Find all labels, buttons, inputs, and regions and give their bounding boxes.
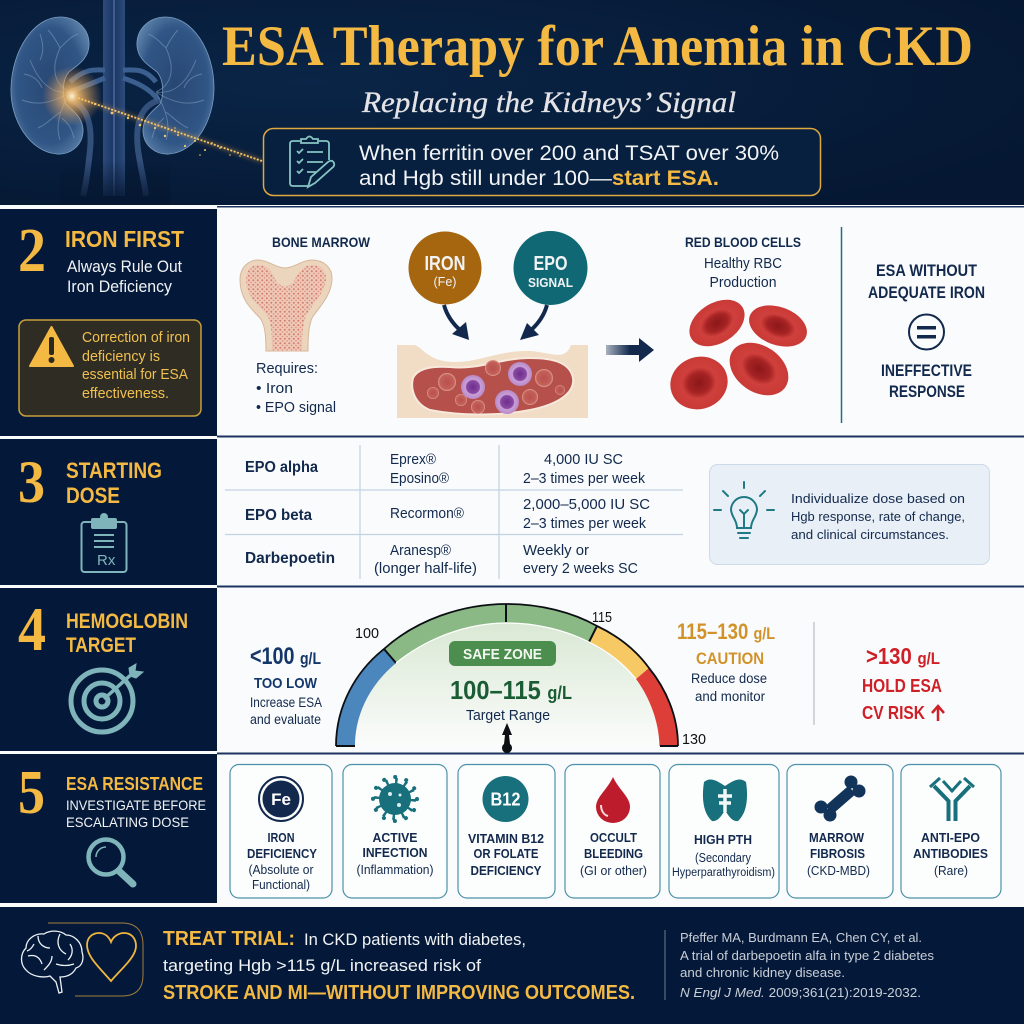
warning text: essential for ESA	[82, 366, 188, 383]
card text: OCCULT	[590, 831, 637, 845]
left status: too low	[250, 643, 322, 727]
callout: start criteria	[264, 128, 820, 196]
target range value	[450, 675, 572, 724]
row: EPO beta	[245, 496, 650, 532]
icon: light bulb	[714, 482, 774, 538]
panel: section 3 starting dose	[0, 439, 217, 585]
row: EPO alpha: EPO alpha	[245, 459, 318, 476]
subheading: Always Rule Out	[67, 257, 182, 276]
safe zone badge: SAFE ZONE	[463, 646, 542, 663]
subtitle: Replacing the Kidneys’ Signal	[361, 86, 736, 119]
right status: hold ESA: HOLD ESA	[862, 676, 942, 696]
callout text: When ferritin over 200 and TSAT over 30%	[359, 142, 779, 165]
iron circle: (Fe)	[434, 274, 456, 289]
gauge: green segment	[384, 604, 597, 663]
citation: Pfeffer MA, Burdmann EA, Chen CY, et al.	[680, 930, 922, 945]
subheading: ESCALATING DOSE	[66, 814, 189, 830]
card text: BLEEDING	[584, 847, 643, 861]
card text: FIBROSIS	[810, 847, 865, 861]
icon: bone	[240, 260, 332, 351]
card text: DEFICIENCY	[470, 864, 542, 878]
heading: hemoglobin target	[66, 610, 188, 657]
right status: hold ESA: >130 g/L	[866, 643, 940, 669]
section number 5: 5	[18, 759, 45, 827]
heading: hemoglobin target: TARGET	[66, 634, 136, 657]
icon: heart	[87, 933, 136, 981]
panel: section 2 iron first	[0, 209, 217, 436]
iron circle	[408, 232, 482, 304]
card text: (Absolute or	[248, 863, 314, 877]
arrow: EPO to marrow	[520, 305, 547, 340]
red blood cells label: Production	[710, 275, 776, 291]
card text	[913, 831, 988, 878]
row: Darbepoetin: (longer half-life)	[374, 560, 477, 577]
red blood cells label: Healthy RBC	[704, 256, 782, 272]
frame around icons	[48, 923, 143, 996]
gauge needle	[502, 723, 512, 753]
TREAT trial summary: STROKE AND MI—WITHOUT IMPROVING OUTCOMES.	[163, 982, 635, 1004]
card text: (Secondary	[695, 851, 752, 865]
callout text: and clinical circumstances.	[791, 527, 949, 542]
card text: (Rare)	[934, 864, 968, 878]
icon: warning triangle	[30, 327, 73, 366]
card text: OR FOLATE	[474, 847, 538, 861]
citation	[680, 930, 935, 1000]
right status: caution: 115–130 g/L	[677, 619, 775, 644]
card text: ACTIVE	[372, 831, 418, 845]
right status: caution: and monitor	[695, 689, 765, 704]
right status: caution: CAUTION	[696, 649, 764, 668]
card text: HIGH PTH	[694, 833, 752, 847]
row: Darbepoetin: Darbepoetin	[245, 550, 335, 567]
icon: B12: B12	[490, 790, 520, 810]
icon: prescription clipboard: Rx	[97, 552, 116, 569]
card text	[468, 832, 544, 878]
heading: ESA resistance: ESA RESISTANCE	[66, 774, 203, 794]
warning text	[82, 329, 190, 402]
callout text	[791, 491, 965, 542]
callout text	[359, 142, 779, 190]
requires list: • EPO signal	[256, 399, 336, 416]
subheading: Iron Deficiency	[67, 277, 172, 296]
icon: magnifier	[88, 840, 133, 884]
card: anti-EPO antibodies	[901, 764, 1001, 898]
gauge: red segment	[636, 668, 678, 746]
bone marrow label: BONE MARROW	[272, 234, 371, 250]
gauge: yellow segment	[589, 626, 649, 679]
TREAT trial summary: TREAT TRIAL:	[163, 928, 295, 950]
row: EPO beta: 2,000–5,000 IU SC	[523, 496, 650, 513]
marrow cross-section	[397, 345, 588, 418]
card text	[580, 831, 647, 878]
arrow: to red blood cells	[606, 338, 654, 362]
row: EPO alpha: Eprex®	[390, 451, 436, 468]
gauge: blue segment	[336, 649, 396, 746]
icon: blood drop	[596, 777, 630, 823]
icon: clipboard and pen	[290, 136, 334, 187]
left status: too low: Increase ESA	[250, 695, 322, 710]
target range value: 100–115 g/L	[450, 675, 572, 705]
card text: (CKD-MBD)	[807, 864, 870, 878]
section number 4: 4	[18, 596, 46, 664]
card text: INFECTION	[362, 846, 428, 860]
right status: caution: Reduce dose	[691, 671, 767, 686]
icon: red blood cells	[663, 290, 813, 417]
card: iron deficiency	[230, 764, 332, 898]
TREAT trial summary: targeting Hgb >115 g/L increased risk of	[163, 956, 481, 975]
card: vitamin B12 or folate	[458, 764, 555, 898]
EPO signal circle: EPO	[534, 253, 568, 275]
equation: ESA without iron is ineffective: INEFFECTIVE	[881, 361, 972, 380]
header banner	[0, 0, 1024, 205]
panel: iron and EPO pathway	[240, 227, 985, 423]
right status: hold ESA	[862, 643, 944, 723]
warning text: deficiency is	[82, 348, 160, 365]
callout text: and Hgb still under 100— start ESA.	[359, 167, 719, 190]
row: EPO alpha: Eposino®	[390, 470, 449, 487]
requires list: • Iron	[256, 380, 293, 397]
section number 2: 2	[18, 217, 46, 285]
card: occult bleeding	[565, 764, 660, 898]
row: Darbepoetin	[245, 542, 638, 577]
subheading	[66, 797, 206, 830]
callout text: Individualize dose based on	[791, 491, 965, 506]
panel: section 5 ESA resistance	[0, 754, 217, 903]
card text: DEFICIENCY	[247, 847, 318, 861]
card text: (GI or other)	[580, 864, 647, 878]
card text: IRON	[268, 831, 294, 845]
TREAT trial summary: In CKD patients with diabetes,	[304, 931, 526, 949]
icon: thyroid	[703, 779, 747, 821]
divider lines	[217, 206, 1024, 754]
gauge tick labels: 100	[355, 625, 379, 642]
iron circle: IRON	[424, 253, 466, 275]
section number 3: 3	[18, 449, 45, 515]
card text: Functional)	[252, 878, 310, 892]
title: ESA Therapy for Anemia in CKD	[222, 15, 973, 78]
left status: too low: <100 g/L	[250, 643, 321, 670]
heading: starting dose	[66, 458, 162, 508]
equation: ESA without iron is ineffective: RESPONSE	[889, 382, 965, 401]
icon: virus	[373, 777, 417, 821]
equation: ESA without iron is ineffective	[868, 261, 985, 401]
card text	[247, 831, 318, 892]
subheading	[67, 257, 182, 296]
warning box	[19, 320, 201, 416]
citation: and chronic kidney disease.	[680, 965, 845, 980]
heading: starting dose: STARTING	[66, 458, 162, 483]
row: EPO alpha: 4,000 IU SC	[544, 451, 623, 468]
card text	[807, 831, 870, 878]
warning text: effectiveness.	[82, 385, 169, 402]
target range value: Target Range	[466, 708, 550, 724]
citation: A trial of darbepoetin alfa in type 2 diabetes	[680, 948, 935, 963]
requires list	[256, 360, 336, 416]
icon: bone	[814, 776, 866, 822]
callout: individualize dose	[710, 464, 990, 564]
card text: Hyperparathyroidism)	[672, 867, 775, 879]
row: EPO alpha	[245, 451, 645, 487]
illustration: kidneys with glowing signal	[11, 0, 262, 205]
icon: antibody	[930, 778, 974, 821]
icon: prescription clipboard	[82, 514, 126, 572]
card text: MARROW	[809, 831, 864, 845]
red blood cells label	[685, 234, 801, 291]
heading: iron first: IRON FIRST	[65, 226, 184, 252]
arrow: iron to marrow	[444, 305, 469, 340]
row: EPO beta: EPO beta	[245, 507, 312, 524]
TREAT trial summary	[163, 928, 635, 1004]
card text: (Inflammation)	[356, 863, 434, 877]
footer banner	[0, 907, 1024, 1024]
row: Darbepoetin: Weekly or	[523, 542, 589, 559]
row: EPO beta: 2–3 times per week	[523, 515, 646, 532]
row: Darbepoetin: every 2 weeks SC	[523, 560, 638, 577]
gauge tick labels: 130	[682, 731, 706, 748]
card text	[356, 831, 434, 877]
card: active infection	[343, 764, 447, 898]
warning text: Correction of iron	[82, 329, 190, 346]
card text	[672, 833, 775, 879]
card: marrow fibrosis	[787, 764, 893, 898]
EPO signal circle	[514, 231, 588, 305]
card text: ANTI-EPO	[921, 831, 980, 845]
citation: N Engl J Med. 2009;361(21):2019-2032.	[680, 985, 921, 1000]
EPO signal circle: SIGNAL	[528, 275, 573, 290]
right status: caution	[677, 619, 775, 704]
card text: ANTIBODIES	[913, 847, 988, 861]
subheading: INVESTIGATE BEFORE	[66, 797, 206, 813]
row: EPO beta: Recormon®	[390, 505, 464, 522]
requires list: Requires:	[256, 360, 318, 377]
heading: starting dose: DOSE	[66, 483, 120, 508]
right status: hold ESA: CV RISK	[862, 703, 925, 723]
safe zone badge	[449, 641, 556, 666]
callout text: Hgb response, rate of change,	[791, 509, 965, 524]
icon: Fe: Fe	[271, 790, 291, 809]
left status: too low: and evaluate	[250, 712, 321, 727]
left status: too low: TOO LOW	[254, 675, 318, 692]
icon: target with arrow	[71, 664, 143, 732]
red blood cells label: RED BLOOD CELLS	[685, 234, 801, 250]
heading: hemoglobin target: HEMOGLOBIN	[66, 610, 188, 633]
card text: VITAMIN B12	[468, 832, 544, 846]
equation: ESA without iron is ineffective: ESA WITHOUT	[876, 261, 978, 280]
table: ESA starting doses	[225, 445, 683, 579]
row: Darbepoetin: Aranesp®	[390, 542, 451, 559]
icon: brain	[22, 931, 83, 993]
panel: section 4 hemoglobin target	[0, 588, 217, 751]
equation: ESA without iron is ineffective: ADEQUATE IRON	[868, 283, 985, 302]
card: high PTH	[669, 764, 779, 898]
gauge tick labels: 115	[592, 609, 612, 626]
hemoglobin gauge	[336, 604, 706, 753]
row: EPO alpha: 2–3 times per week	[523, 470, 645, 487]
gauge tick labels	[355, 609, 706, 748]
